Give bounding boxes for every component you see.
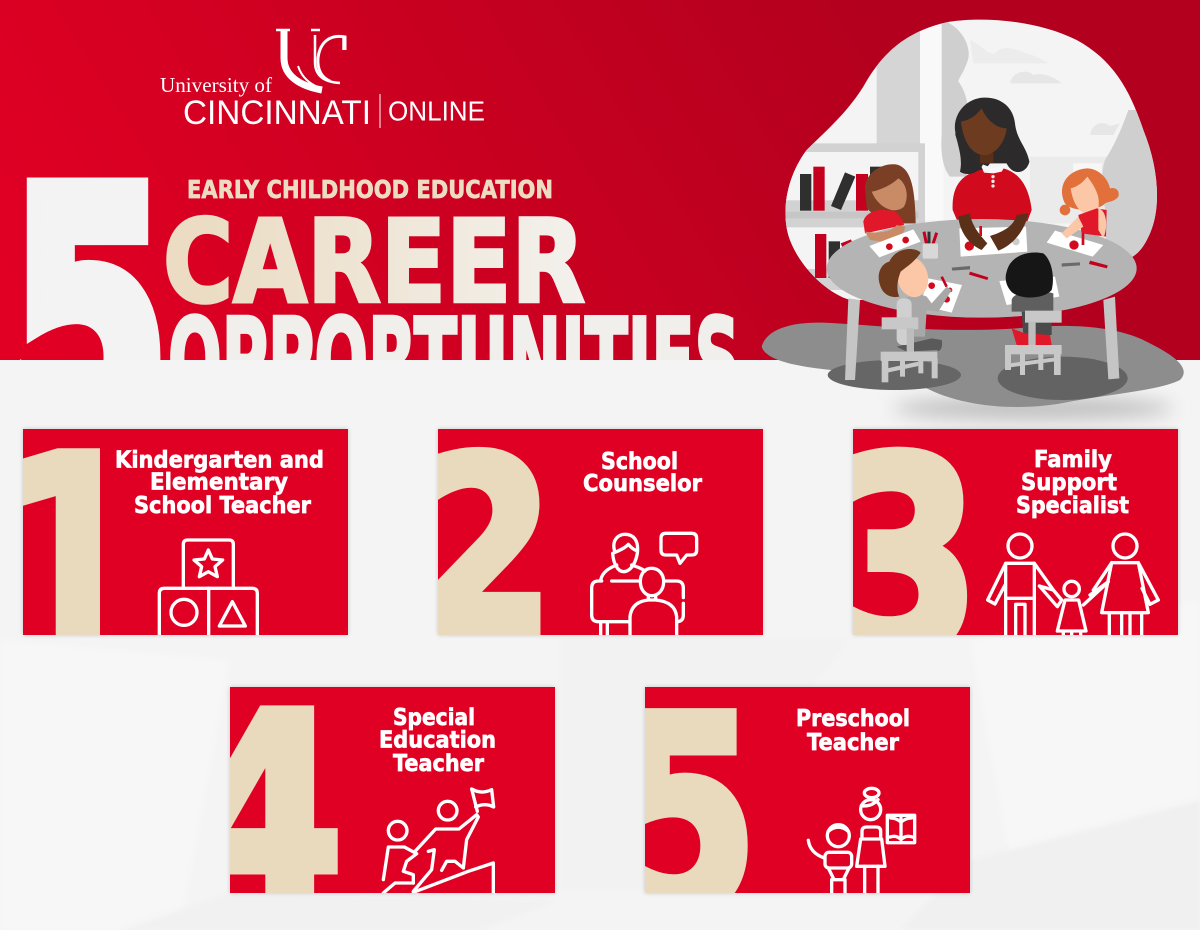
title bbox=[379, 705, 496, 777]
logo: University of Cincinnati Online: ONLINE bbox=[388, 96, 485, 126]
title bbox=[1016, 447, 1129, 519]
heading: career: CAREER bbox=[163, 196, 585, 328]
title bbox=[115, 448, 324, 519]
career card 3: Family Support Specialist bbox=[851, 427, 1180, 637]
career card 1: Kindergarten and Elementary School Teacher bbox=[21, 427, 350, 637]
teacher bbox=[953, 98, 1032, 223]
big numeral 5: 5 bbox=[9, 119, 170, 521]
numeral 2: 2 bbox=[412, 407, 554, 687]
icon: UC monogram bbox=[276, 30, 345, 90]
logo: University of Cincinnati Online: University of bbox=[160, 73, 272, 97]
room background blob bbox=[780, 13, 1163, 307]
title bbox=[583, 449, 703, 497]
title: Elementary bbox=[150, 470, 288, 496]
child: front left boy bbox=[879, 249, 962, 352]
table legs bbox=[845, 297, 1119, 380]
title: Preschool bbox=[796, 706, 910, 732]
title: Specialist bbox=[1016, 493, 1129, 519]
heading: opportunities: OPPORTUNITIES bbox=[168, 294, 740, 427]
title bbox=[796, 706, 910, 756]
icon: counselor and client bbox=[592, 533, 697, 645]
title: Education bbox=[379, 728, 496, 754]
title: Support bbox=[1021, 470, 1117, 496]
title: School bbox=[601, 449, 678, 475]
logo: University of Cincinnati Online bbox=[160, 30, 485, 132]
icon: teacher, child and book bbox=[808, 788, 915, 903]
icon: family holding hands bbox=[988, 534, 1158, 645]
logo: University of Cincinnati Online: CINCINNATI bbox=[183, 94, 371, 132]
table bbox=[827, 219, 1137, 318]
career card 2: School Counselor bbox=[436, 427, 765, 637]
title: Family bbox=[1034, 447, 1112, 473]
title: School Teacher bbox=[134, 493, 312, 519]
child: left girl bbox=[863, 164, 921, 257]
teacher's paper and hands bbox=[958, 213, 1028, 257]
illustration: teacher and children at a table bbox=[762, 13, 1184, 420]
numeral 3: 3 bbox=[830, 401, 980, 716]
title: Kindergarten and bbox=[115, 448, 324, 474]
child: front right boy bbox=[999, 252, 1059, 345]
floor shadow bbox=[762, 323, 1184, 420]
title: Counselor bbox=[583, 471, 703, 497]
icon: climbers with flag bbox=[383, 789, 494, 903]
title: Teacher bbox=[807, 730, 900, 756]
heading: early childhood education: EARLY CHILDHOOD EDUCATION bbox=[187, 175, 553, 204]
career card 5: Preschool Teacher bbox=[643, 685, 972, 895]
title: Teacher bbox=[393, 751, 485, 777]
child: right girl bbox=[1047, 168, 1119, 257]
icon: toy blocks bbox=[159, 540, 257, 645]
career card 4: Special Education Teacher bbox=[228, 685, 557, 895]
chairs bbox=[881, 311, 1062, 382]
header red banner bbox=[0, 0, 1200, 360]
title: Special bbox=[393, 705, 475, 731]
pencil cup and pencils bbox=[923, 232, 1108, 280]
